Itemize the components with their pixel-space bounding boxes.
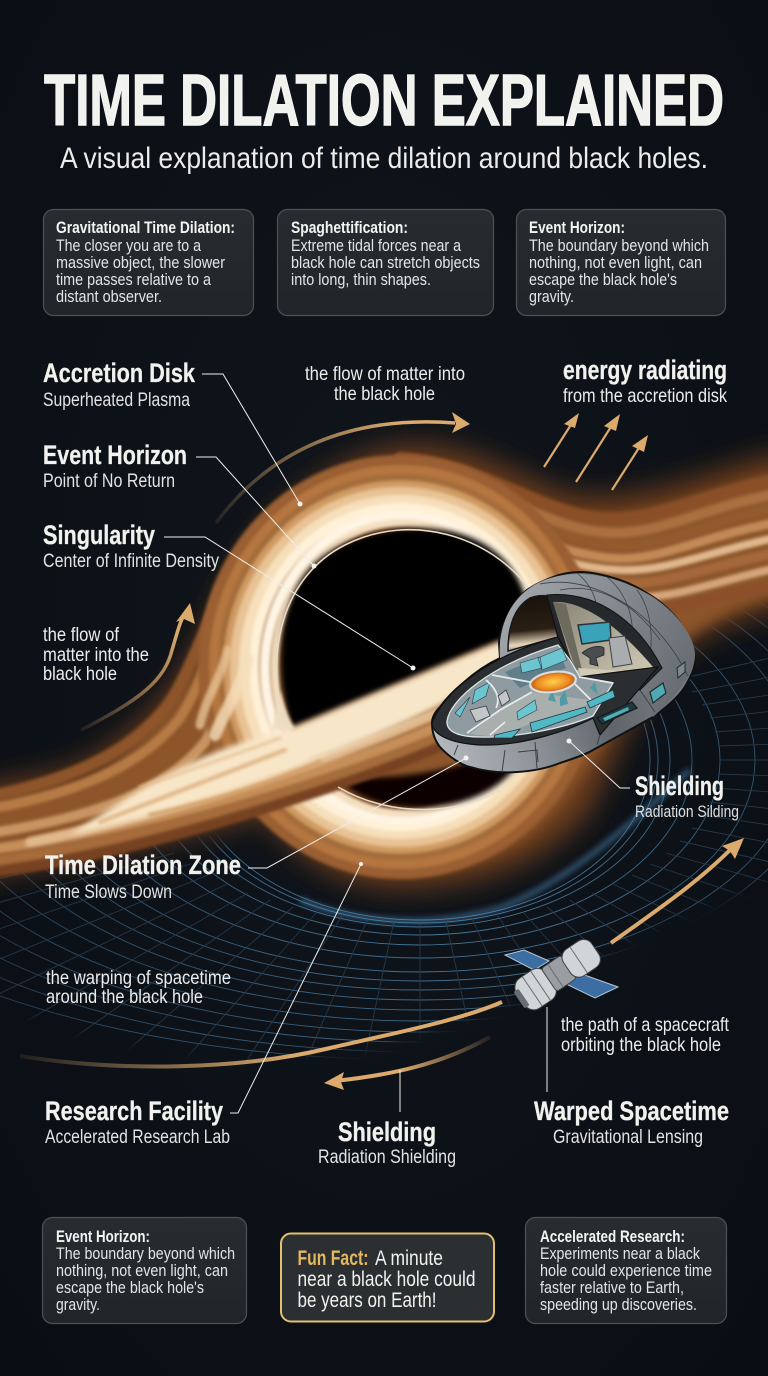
note: spacecraft path xyxy=(561,1014,729,1056)
note: flow of matter left: black hole xyxy=(43,663,117,685)
panel: event horizon top: Event Horizon: xyxy=(529,219,625,237)
panel: spaghettification xyxy=(278,210,494,316)
note: spacecraft path: the path of a spacecraft xyxy=(561,1014,729,1036)
arrow: top matter flow xyxy=(216,412,470,523)
lab furniture xyxy=(470,690,510,722)
lensing spike xyxy=(272,690,296,730)
arrow: orbit to upper right xyxy=(611,838,744,943)
lower floor zone xyxy=(470,692,590,737)
panel: accelerated research: Accelerated Research: xyxy=(540,1228,685,1246)
deck floor xyxy=(447,645,613,737)
dome shell xyxy=(500,574,695,717)
panel: event horizon top: nothing, not even light, can xyxy=(529,254,702,272)
panel: gravitational time dilation: distant observer. xyxy=(56,288,162,306)
door xyxy=(609,636,632,667)
note: flow of matter top xyxy=(305,363,465,405)
panel: event horizon bottom: Event Horizon: xyxy=(56,1228,150,1246)
arrow: long orbit arc xyxy=(20,1002,502,1066)
panel: event horizon bottom: nothing, not even light, can xyxy=(56,1262,228,1280)
black hole shadow lower xyxy=(335,735,530,808)
arch window xyxy=(508,596,558,651)
panel: spaghettification: black hole can stretch objects xyxy=(291,254,480,272)
note: flow of matter left: the flow of xyxy=(43,624,119,646)
left disk band streaks xyxy=(0,646,570,874)
arrow: lower orbit xyxy=(324,1037,490,1090)
left disk swirl streaks xyxy=(0,590,250,836)
label: singularity: Singularity xyxy=(43,520,155,550)
hull seams xyxy=(454,690,655,772)
band texture streaks xyxy=(100,650,320,822)
label: shielding bottom: Radiation Shielding xyxy=(318,1147,456,1168)
label: shielding right: Shielding xyxy=(635,771,724,801)
note: warping of spacetime: around the black hole xyxy=(46,986,203,1008)
arrows: energy radiating xyxy=(544,413,648,490)
black hole shadow upper xyxy=(281,528,530,728)
ring streaks xyxy=(204,461,596,873)
panel: accelerated research: Experiments near a black xyxy=(540,1245,701,1263)
label: research facility: Research Facility xyxy=(45,1096,223,1126)
panel: accelerated research: speeding up discoveries. xyxy=(540,1296,697,1314)
note: flow of matter left: matter into the xyxy=(43,644,149,666)
solar panel upper xyxy=(505,950,549,970)
label: accretion disk: Superheated Plasma xyxy=(43,390,190,411)
panel: accelerated research: hole could experience time xyxy=(540,1262,712,1280)
room floor xyxy=(578,668,640,685)
reactor core xyxy=(529,669,577,695)
teal consoles xyxy=(494,690,615,738)
spacetime well glowing edge xyxy=(300,770,690,921)
panel: event horizon bottom: The boundary beyond which xyxy=(56,1245,235,1263)
rim window lights xyxy=(603,707,629,721)
panel: spaghettification: Extreme tidal forces near a xyxy=(291,237,462,255)
label: singularity xyxy=(43,520,219,572)
label: event horizon: Event Horizon xyxy=(43,440,187,470)
label: warped spacetime: Warped Spacetime xyxy=(534,1096,729,1126)
deck dark rim xyxy=(432,637,658,745)
label: research facility xyxy=(45,1096,230,1148)
panel: event horizon top xyxy=(516,210,726,316)
rim window panels xyxy=(597,702,637,724)
label: energy radiating: from the accretion disk xyxy=(563,385,727,407)
label: shielding right: Radiation Silding xyxy=(635,803,739,821)
panel: event horizon bottom xyxy=(42,1218,246,1324)
note: warping of spacetime xyxy=(46,967,231,1008)
note: spacecraft path: orbiting the black hole xyxy=(561,1034,721,1056)
teal panels xyxy=(455,648,567,720)
note: flow of matter left xyxy=(43,624,149,685)
label: shielding bottom: Shielding xyxy=(338,1117,436,1147)
arrow: left matter flow xyxy=(81,603,195,730)
solar panel lower xyxy=(564,972,618,998)
callout: fun fact: Fun Fact: xyxy=(298,1247,368,1270)
body modules xyxy=(509,934,605,1015)
label: time dilation zone: Time Dilation Zone xyxy=(45,850,241,880)
panel: event horizon bottom: escape the black hole's xyxy=(56,1279,204,1297)
label: time dilation zone xyxy=(45,850,241,903)
label: event horizon xyxy=(43,440,187,492)
accretion disk and black hole xyxy=(0,445,768,888)
note: flow of matter top: the black hole xyxy=(334,383,435,405)
callout: fun fact: A minute xyxy=(375,1247,443,1270)
panel: gravitational time dilation: massive object, the slower xyxy=(56,254,225,272)
side port window xyxy=(650,683,666,703)
icon: satellite xyxy=(505,934,618,1015)
disk inner body xyxy=(0,465,768,870)
thin photon ring xyxy=(277,530,530,810)
panel: accelerated research: faster relative to Earth, xyxy=(540,1279,684,1297)
side vent xyxy=(677,662,685,678)
panel: event horizon top: escape the black hole's xyxy=(529,271,677,289)
research facility spacecraft cutaway xyxy=(432,572,695,772)
deck partition walls xyxy=(467,675,613,735)
rear wall windows xyxy=(505,650,566,688)
panel: gravitational time dilation: Gravitational Time Dilation: xyxy=(56,219,235,237)
disk outer glow xyxy=(0,445,768,888)
label: accretion disk xyxy=(43,358,195,411)
panel: spaghettification: Spaghettification: xyxy=(291,219,408,237)
callout: fun fact xyxy=(281,1234,494,1322)
panel: accelerated research xyxy=(526,1218,726,1324)
label: singularity: Center of Infinite Density xyxy=(43,551,219,572)
label: event horizon: Point of No Return xyxy=(43,471,175,492)
leader lines xyxy=(164,374,630,1113)
panel: spaghettification: into long, thin shapes. xyxy=(291,271,431,289)
callout: fun fact: near a black hole could xyxy=(298,1268,476,1291)
label: warped spacetime xyxy=(534,1096,729,1148)
panel: event horizon top: gravity. xyxy=(529,288,574,306)
interior room xyxy=(553,602,653,685)
panel: event horizon bottom: gravity. xyxy=(56,1296,100,1314)
disk bright band xyxy=(70,620,562,835)
label: accretion disk: Accretion Disk xyxy=(43,358,195,388)
label: shielding right xyxy=(635,771,739,821)
panel: gravitational time dilation xyxy=(44,210,254,316)
label: energy radiating: energy radiating xyxy=(563,355,727,385)
hull outline xyxy=(432,572,695,772)
crew chairs xyxy=(548,682,598,706)
note: flow of matter top: the flow of matter into xyxy=(305,363,465,385)
label: research facility: Accelerated Research Lab xyxy=(45,1127,230,1148)
room left wall xyxy=(553,602,582,670)
label: shielding bottom xyxy=(318,1117,456,1168)
note: warping of spacetime: the warping of spacetime xyxy=(46,967,231,989)
panel: event horizon top: The boundary beyond which xyxy=(529,237,709,255)
wall screen xyxy=(578,622,611,644)
dome inner frame xyxy=(547,595,662,690)
panel: gravitational time dilation: The closer you are to a xyxy=(56,237,202,255)
dome panel lines xyxy=(540,573,688,676)
label: energy radiating xyxy=(563,355,727,407)
label: warped spacetime: Gravitational Lensing xyxy=(553,1127,703,1148)
console xyxy=(582,646,604,666)
label: time dilation zone: Time Slows Down xyxy=(45,882,172,903)
panel: gravitational time dilation: time passes relative to a xyxy=(56,271,212,289)
callout: fun fact: be years on Earth! xyxy=(298,1289,436,1312)
right disk streaks xyxy=(400,458,768,613)
warped spacetime grid xyxy=(0,602,768,1066)
